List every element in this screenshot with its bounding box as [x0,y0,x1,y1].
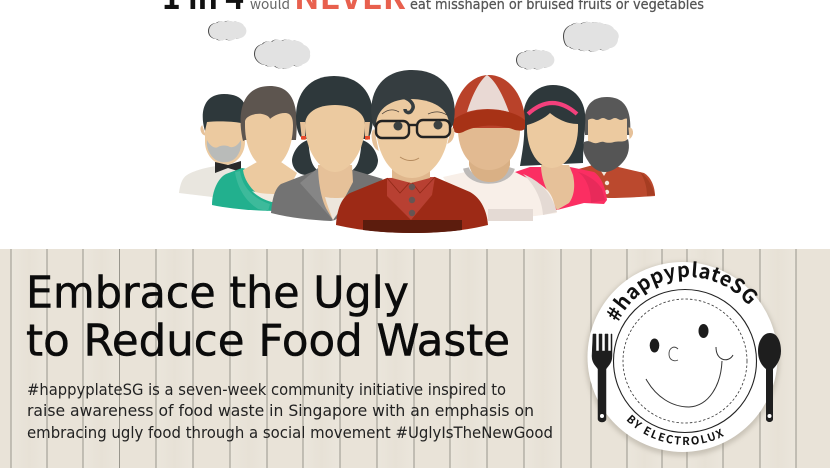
thought clouds [208,21,619,70]
person: man with bow tie [179,94,269,201]
cloud 1 [208,21,246,40]
title: Embrace the Ugly [26,268,409,318]
top statistic headline [162,0,704,19]
person: man with red cap [443,75,557,221]
happy plate logo [584,260,781,458]
description text: #happyplateSG is a seven-week community initiative inspired to [27,380,506,399]
smiley face [646,324,733,407]
icon: spoon [758,333,781,422]
cloud 2 [254,40,310,69]
logo text: #happyplateSG: #happyplateSG [606,261,758,321]
description text: embracing ugly food through a social movement #UglyIsTheNewGood [27,423,553,442]
title [26,268,510,366]
cloud 4 [516,50,554,70]
person: central man with glasses [336,70,488,233]
group of people [179,70,655,233]
person: woman in grey blazer [271,76,383,221]
plate [588,262,778,452]
person: man in green shirt [212,86,302,211]
logo text: by Electrolux: BY ELECTROLUX [626,414,724,445]
wooden plank panel [0,249,830,468]
person: bearded man in red shirt [575,97,655,198]
person: woman with pink headband [515,85,607,210]
description text [27,380,553,442]
description text: raise awareness of food waste in Singapore with an emphasis on [27,401,534,420]
title: to Reduce Food Waste [26,316,510,366]
headband [528,103,577,114]
cloud 3 [563,22,619,52]
icon: fork [592,334,612,422]
